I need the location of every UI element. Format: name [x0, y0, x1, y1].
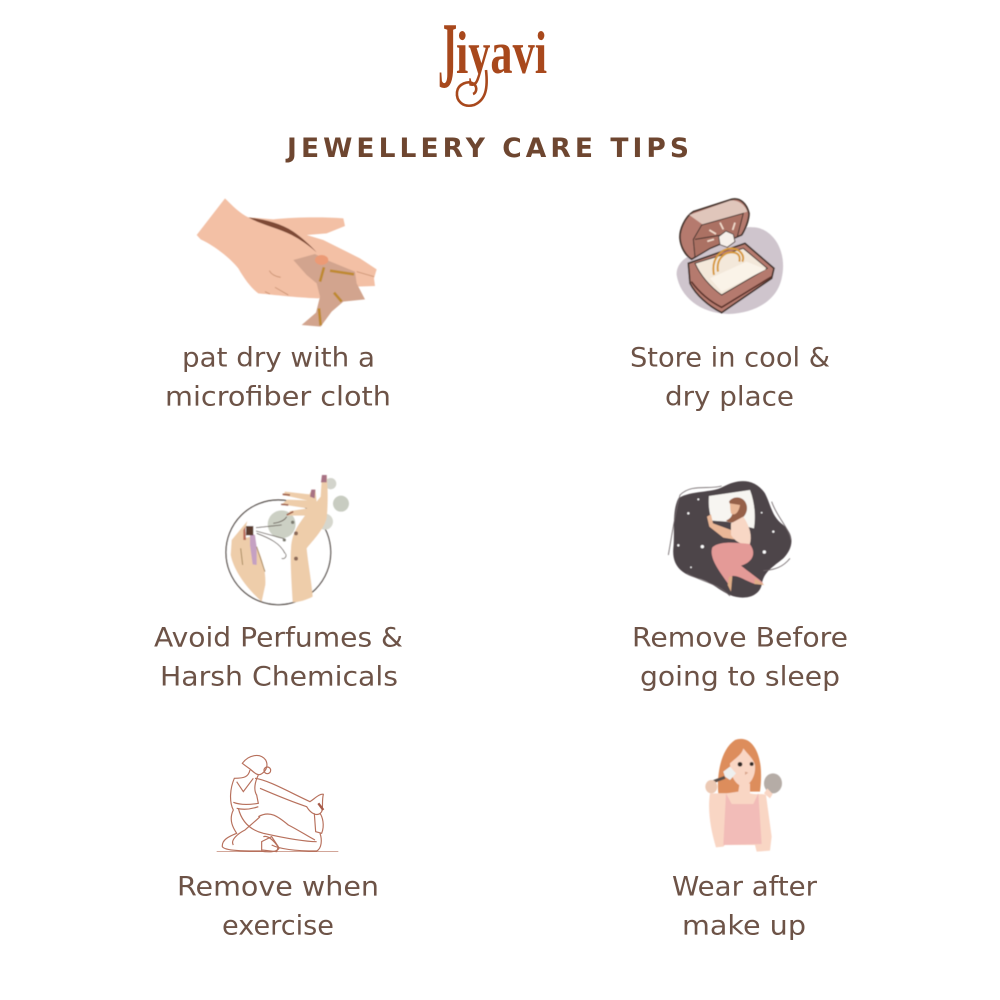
- tip: avoid perfumes and harsh chemicals: Harsh Chemicals: [160, 662, 398, 692]
- caption: Remove when: [177, 872, 379, 902]
- caption: Wear after: [672, 872, 817, 902]
- icon: sleeping woman: [668, 481, 791, 598]
- caption: Avoid Perfumes &: [154, 622, 403, 654]
- logo: Jiyavi: J: [438, 4, 457, 108]
- caption: pat dry with a: [182, 342, 375, 374]
- tip: remove when exercise: [177, 755, 379, 942]
- icon: woman with makeup brush and mirror: [705, 739, 782, 852]
- tip: remove before going to sleep: [632, 481, 848, 692]
- icon: yoga line drawing: [217, 755, 338, 852]
- tip: remove before going to sleep: going to sleep: [640, 662, 840, 692]
- tip: pat dry with a microfiber cloth: microfiber cloth: [165, 382, 391, 412]
- icon: ring box: [677, 199, 783, 314]
- tip: remove when exercise: exercise: [222, 910, 334, 942]
- logo: Jiyavi: [438, 4, 547, 108]
- caption: Remove Before: [632, 622, 848, 654]
- tip: pat dry with a microfiber cloth: [165, 198, 391, 412]
- tip: wear after make up: [672, 739, 817, 942]
- caption: Store in cool &: [630, 342, 830, 374]
- tip: wear after make up: make up: [682, 910, 806, 942]
- tip: avoid perfumes and harsh chemicals: [154, 475, 403, 692]
- tip: store in cool and dry place: dry place: [665, 382, 794, 412]
- title: JEWELLERY CARE TIPS: [285, 133, 689, 164]
- logo: Jiyavi: iyavi: [456, 20, 547, 86]
- icon: perfume on wrist: [226, 475, 349, 605]
- tip: store in cool and dry place: [630, 199, 830, 412]
- icon: hand with cloth: [197, 198, 377, 327]
